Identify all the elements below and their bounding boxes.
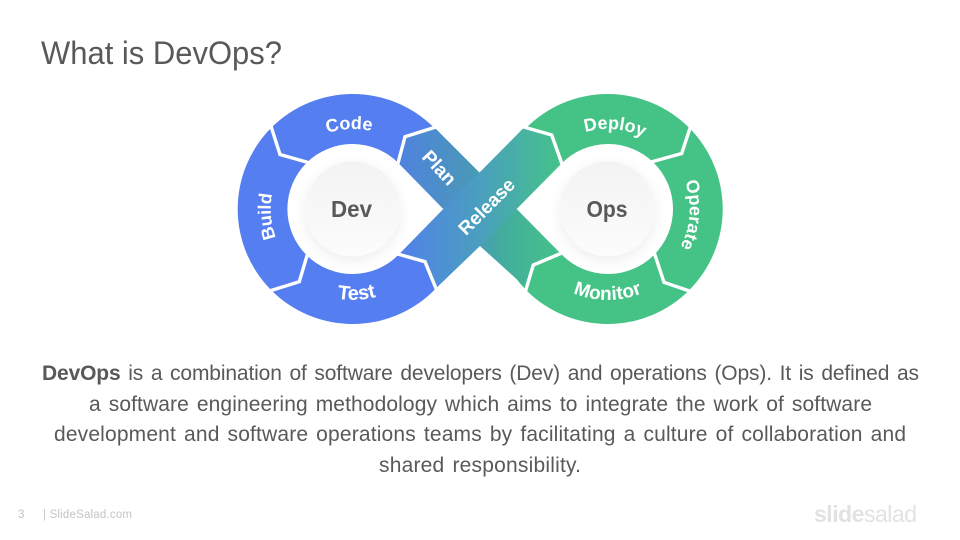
white centre shape right — [517, 144, 673, 274]
description paragraph: development and software operations teams by facilitating a culture of collaboration and — [54, 423, 906, 446]
description paragraph — [42, 362, 919, 477]
ops hub — [560, 162, 655, 256]
description paragraph: DevOps is a combination of software developers (Dev) and operations (Ops). It is defined as — [42, 362, 919, 385]
ops hub: Ops — [586, 196, 628, 222]
footer source: | SlideSalad.com — [43, 509, 132, 521]
left blue ring — [238, 94, 468, 324]
label: code: Code — [326, 116, 372, 132]
label: test: Test — [338, 284, 376, 300]
description paragraph: shared responsibility. — [379, 454, 581, 477]
infinity loop diagram — [238, 94, 723, 324]
white centre shape left — [287, 144, 443, 274]
page number: 3 — [18, 509, 24, 521]
release crossing band — [398, 128, 562, 288]
dev hub: Dev — [331, 196, 372, 222]
brand logo: slidesalad — [814, 501, 917, 527]
segment separators — [270, 125, 691, 292]
plan and monitor-side crossing band — [398, 128, 560, 288]
label: plan: Plan — [417, 147, 460, 190]
label: release: Release — [455, 175, 520, 240]
label: monitor: Monitor — [574, 281, 640, 300]
title: What is DevOps? — [41, 35, 282, 71]
label: deploy: Deploy — [584, 117, 647, 138]
description paragraph: a software engineering methodology which aims to integrate the work of software — [89, 393, 872, 416]
dev hub — [305, 162, 400, 256]
label: build: Build — [258, 194, 276, 240]
label: operate: Operate — [682, 180, 700, 250]
right green ring — [493, 94, 723, 324]
